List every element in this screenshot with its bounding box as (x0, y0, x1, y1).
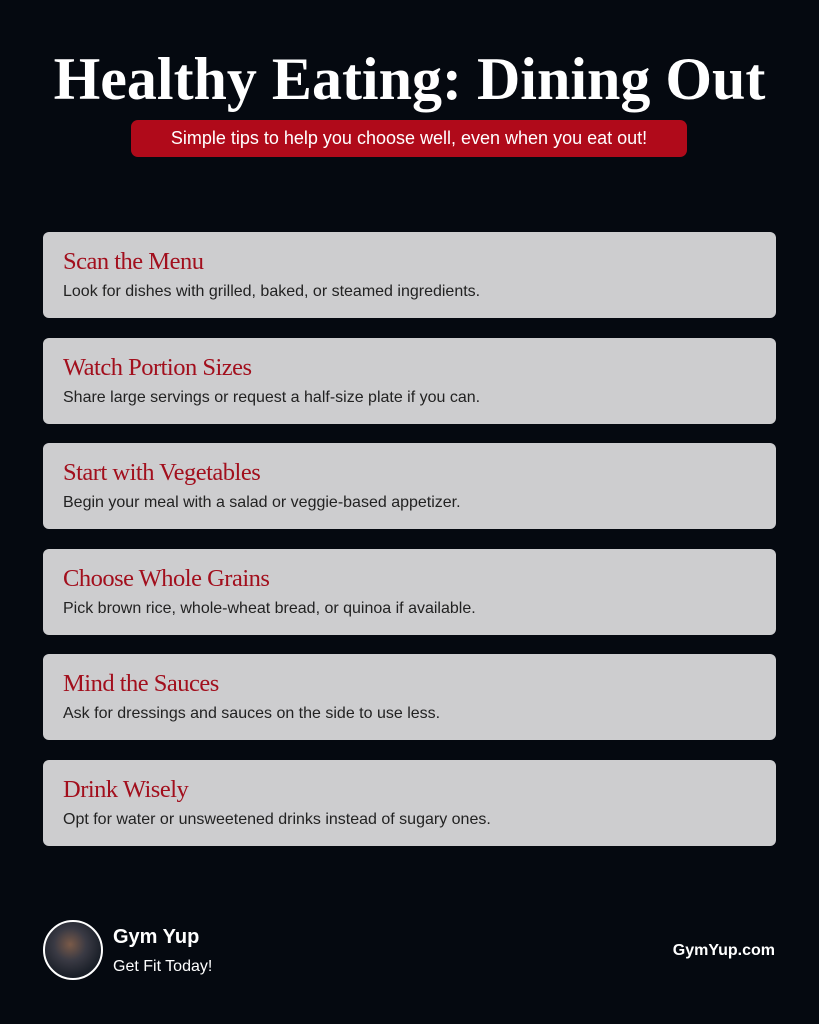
card: drink: Opt for water or unsweetened drinks instead of sugary ones. (63, 811, 491, 828)
card: scan the menu (43, 232, 776, 318)
card: sauces (43, 654, 776, 740)
subtitle pill: Simple tips to help you choose well, even when you eat out! (171, 128, 647, 148)
card: whole grains: Choose Whole Grains (63, 565, 269, 592)
card: scan the menu: Look for dishes with grilled, baked, or steamed ingredients. (63, 283, 480, 300)
footer brand (43, 920, 212, 980)
title: Healthy Eating: Dining Out (54, 46, 765, 112)
card: portion sizes (43, 338, 776, 424)
icon: avatar (43, 920, 103, 980)
card: scan the menu: Scan the Menu (63, 248, 203, 275)
tagline: Get Fit Today! (113, 958, 212, 975)
card: portion sizes: Watch Portion Sizes (63, 354, 252, 381)
card: drink (43, 760, 776, 846)
card: vegetables: Start with Vegetables (63, 459, 260, 486)
card: drink: Drink Wisely (63, 776, 188, 803)
card: vegetables (43, 443, 776, 529)
card: whole grains: Pick brown rice, whole-wheat bread, or quinoa if available. (63, 600, 476, 617)
card: portion sizes: Share large servings or request a half-size plate if you can. (63, 389, 480, 406)
card: whole grains (43, 549, 776, 635)
brand name: Gym Yup (113, 926, 199, 948)
card: sauces: Mind the Sauces (63, 670, 219, 697)
subtitle pill (131, 120, 687, 157)
card: vegetables: Begin your meal with a salad or veggie-based appetizer. (63, 494, 461, 511)
website: GymYup.com (673, 942, 775, 959)
card: sauces: Ask for dressings and sauces on the side to use less. (63, 705, 440, 722)
